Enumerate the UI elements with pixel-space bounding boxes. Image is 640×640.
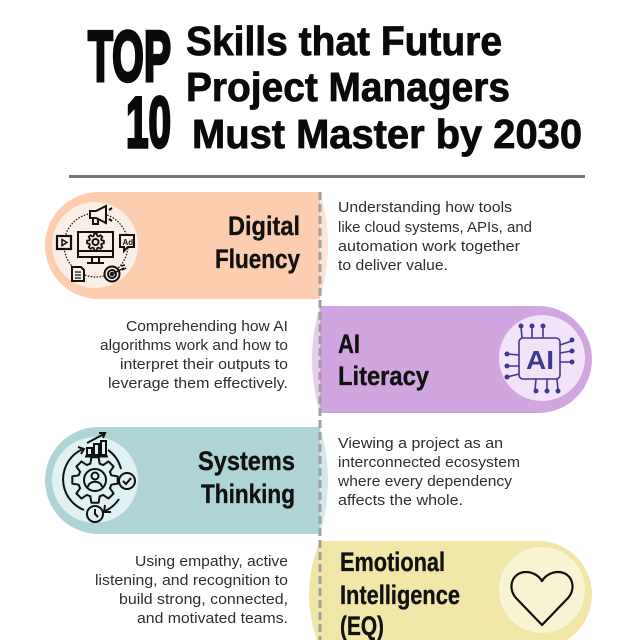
label: digital fluency: Fluency — [215, 244, 300, 274]
label: systems thinking: Systems — [198, 446, 295, 476]
text: emotional intelligence description: listening, and recognition to — [95, 572, 288, 589]
text: ai literacy description: algorithms work and how to — [100, 337, 288, 354]
label: emotional intelligence: Emotional — [340, 547, 445, 577]
text: emotional intelligence description: Using empathy, active — [135, 553, 288, 570]
label: systems thinking — [198, 446, 295, 509]
panel: ai literacy: AI — [526, 345, 554, 375]
text: systems thinking description: Viewing a project as an — [338, 435, 503, 452]
text: ai literacy description — [100, 318, 288, 392]
panel: digital fluency: Ad — [122, 238, 133, 247]
title — [88, 18, 582, 163]
panel: digital fluency — [45, 192, 328, 299]
text: ai literacy description: interpret their outputs to — [120, 356, 288, 373]
icon: heart — [511, 572, 573, 625]
title: TOP — [88, 18, 171, 97]
icon: digital tools — [57, 206, 134, 282]
label: ai literacy: AI — [338, 329, 360, 359]
title: Project Managers — [186, 64, 510, 110]
text: digital fluency description: automation work together — [338, 238, 520, 255]
text: digital fluency description: to deliver value. — [338, 257, 448, 274]
label: emotional intelligence: Intelligence — [340, 580, 460, 610]
title: Skills that Future — [186, 18, 502, 64]
text: digital fluency description — [338, 199, 532, 274]
text: digital fluency description: like cloud systems, APIs, and — [338, 219, 532, 236]
title: 10 — [126, 84, 171, 163]
text: emotional intelligence description: and motivated teams. — [137, 610, 288, 627]
label: digital fluency: Digital — [228, 211, 300, 241]
text: ai literacy description: leverage them effectively. — [108, 375, 288, 392]
label: ai literacy — [338, 329, 429, 391]
text: systems thinking description: where every dependency — [337, 473, 513, 490]
text: digital fluency description: Understanding how tools — [338, 199, 512, 216]
title: Must Master by 2030 — [192, 111, 582, 157]
panel: systems thinking — [45, 427, 328, 534]
label: ai literacy: Literacy — [338, 361, 429, 391]
text: ai literacy description: Comprehending how AI — [126, 318, 288, 335]
panel: ai literacy — [312, 306, 592, 413]
label: digital fluency — [215, 211, 300, 274]
text: systems thinking description: interconnected ecosystem — [338, 454, 520, 471]
text: systems thinking description: affects the whole. — [338, 492, 463, 509]
icon: systems gear — [63, 433, 135, 522]
label: systems thinking: Thinking — [201, 479, 295, 509]
text: emotional intelligence description — [95, 553, 288, 627]
label: emotional intelligence — [340, 547, 460, 640]
text: emotional intelligence description: build strong, connected, — [119, 591, 288, 608]
text: systems thinking description — [337, 435, 520, 509]
icon: ai chip — [504, 324, 574, 394]
panel: emotional intelligence — [309, 541, 592, 640]
